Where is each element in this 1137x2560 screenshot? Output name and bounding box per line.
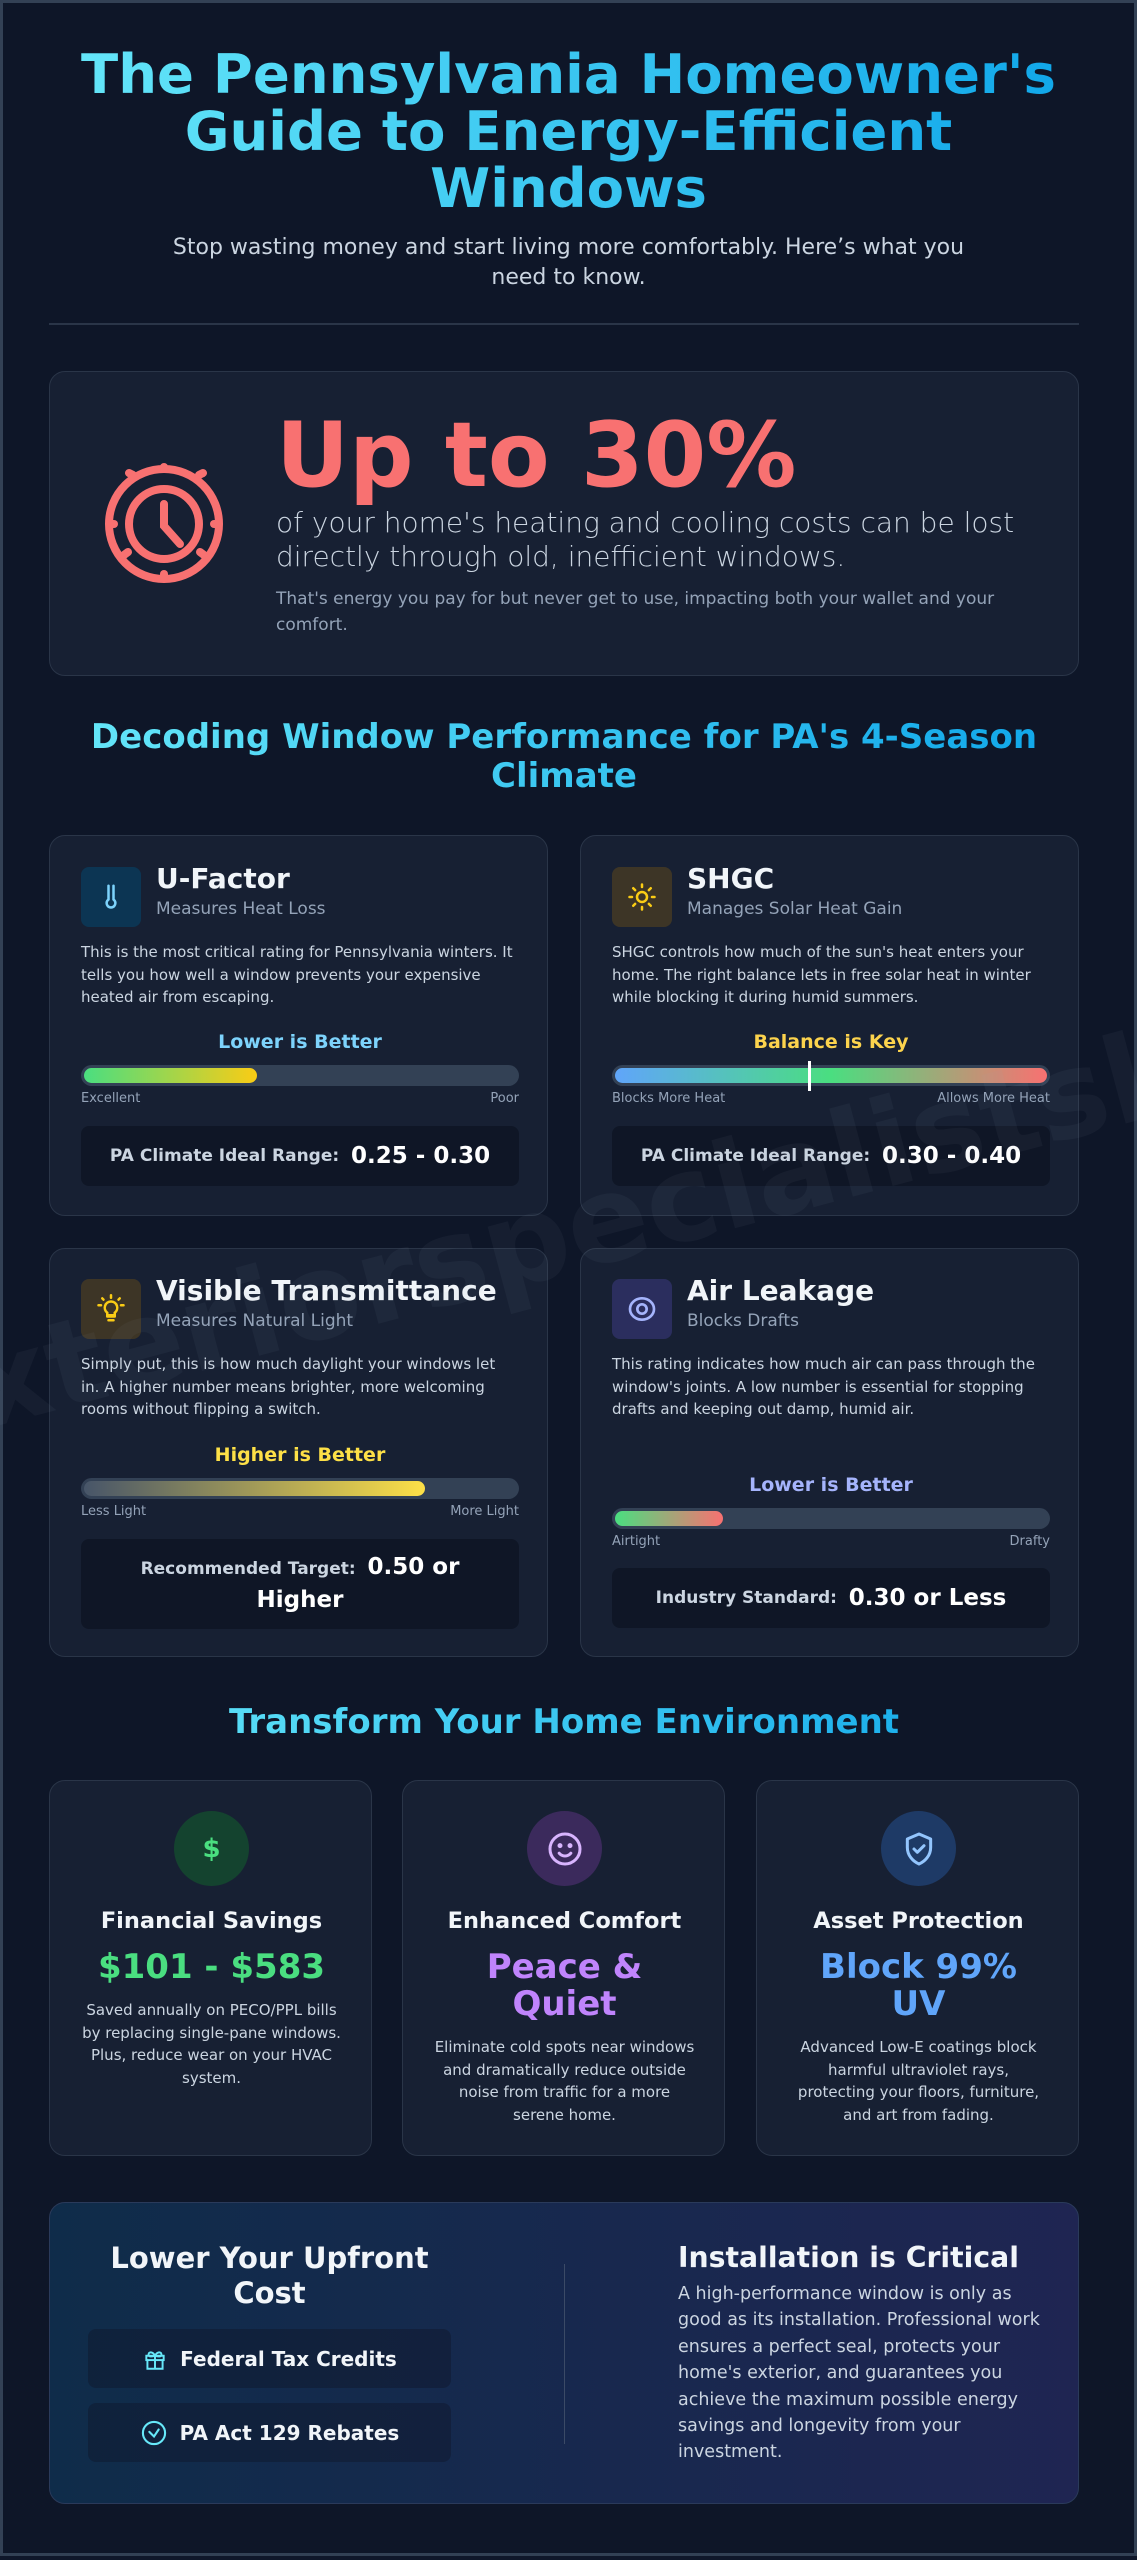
panel: financial savings: $101 - $583 bbox=[98, 1947, 325, 1987]
panel: SHGC: Balance is Key bbox=[753, 1031, 909, 1053]
text: installation: achieve the maximum possible energy bbox=[678, 2390, 1018, 2410]
panel: U-Factor: tells you how well a window prevents your expensive bbox=[81, 966, 481, 984]
heading: decoding: Decoding Window Performance for PA's 4-Season bbox=[91, 717, 1037, 757]
panel: Air Leakage: Industry Standard: bbox=[656, 1588, 837, 1608]
panel: Air Leakage: Lower is Better bbox=[749, 1474, 913, 1496]
bar: shgc bbox=[612, 1065, 1050, 1086]
panel: U-Factor: This is the most critical rating for Pennsylvania winters. It bbox=[81, 943, 513, 961]
stat description: of your home's heating and cooling costs can be lost bbox=[276, 506, 1014, 539]
panel: U-Factor: heated air from escaping. bbox=[81, 988, 274, 1006]
button: act 129 bbox=[88, 2403, 451, 2462]
text: installation: ensures a perfect seal, protects your bbox=[678, 2337, 1000, 2357]
panel: Air Leakage bbox=[580, 1248, 1079, 1657]
panel: Air Leakage: Airtight bbox=[612, 1534, 660, 1549]
panel: Air Leakage: This rating indicates how much air can pass through the bbox=[612, 1355, 1035, 1373]
button: tax credits bbox=[88, 2329, 451, 2388]
icon: dollar bbox=[174, 1811, 249, 1886]
panel: Visible Transmittance: in. A higher number means brighter, more welcoming bbox=[81, 1378, 485, 1396]
text: installation: good as its installation. Professional work bbox=[678, 2310, 1040, 2330]
button: act 129: PA Act 129 Rebates bbox=[180, 2420, 399, 2444]
icon: dollar: $ bbox=[202, 1834, 221, 1864]
heading: decoding: Climate bbox=[491, 756, 637, 796]
icon: smile bbox=[527, 1811, 602, 1886]
panel: Air Leakage: Air Leakage bbox=[687, 1274, 874, 1307]
panel: U-Factor: Poor bbox=[490, 1091, 519, 1106]
stat description: directly through old, inefficient windows. bbox=[276, 540, 845, 573]
text: installation: home's exterior, and guarantees you bbox=[678, 2363, 1002, 2383]
panel: SHGC: home. The right balance lets in free solar heat in winter bbox=[612, 966, 1031, 984]
panel: Visible Transmittance: Higher bbox=[257, 1587, 343, 1613]
panel: SHGC: Blocks More Heat bbox=[612, 1091, 725, 1106]
ideal range: PA Climate Ideal Range: bbox=[110, 1146, 339, 1166]
heading: lower cost: Cost bbox=[233, 2276, 306, 2310]
panel: asset protection: Asset Protection bbox=[813, 1908, 1024, 1934]
text: installation bbox=[678, 2284, 1040, 2462]
panel: financial savings: system. bbox=[182, 2068, 241, 2086]
text: installation: savings and longevity from your bbox=[678, 2416, 961, 2436]
icon: bulb bbox=[81, 1279, 141, 1339]
panel: Air Leakage: 0.30 or Less bbox=[849, 1585, 1006, 1611]
panel: Air Leakage: window's joints. A low number is essential for stopping bbox=[612, 1378, 1024, 1396]
ideal range: 0.25 - 0.30 bbox=[351, 1143, 490, 1169]
panel: Visible Transmittance: Less Light bbox=[81, 1504, 146, 1519]
title: The Pennsylvania Homeowner's bbox=[81, 42, 1056, 106]
panel: comfort bbox=[402, 1780, 725, 2156]
panel: SHGC: 0.30 - 0.40 bbox=[882, 1143, 1021, 1169]
panel: Visible Transmittance: Recommended Target: 0.50 or bbox=[141, 1554, 459, 1580]
subtitle: need to know. bbox=[491, 265, 646, 290]
title: Guide to Energy-Efficient bbox=[185, 99, 952, 163]
icon: alarm clock bbox=[105, 463, 223, 583]
title: Windows bbox=[430, 156, 707, 220]
heading: transform: Transform Your Home Environment bbox=[229, 1702, 899, 1742]
text: installation: investment. bbox=[678, 2442, 782, 2462]
panel: U-Factor: U-Factor bbox=[156, 862, 290, 895]
panel: Visible Transmittance: Simply put, this is how much daylight your windows let bbox=[81, 1355, 495, 1373]
panel: financial savings: Saved annually on PECO/PPL bills bbox=[86, 2001, 337, 2019]
icon: shield bbox=[881, 1811, 956, 1886]
panel: SHGC: Allows More Heat bbox=[937, 1091, 1050, 1106]
panel: Visible Transmittance: Visible Transmittance bbox=[156, 1274, 497, 1307]
panel: Air Leakage: Blocks Drafts bbox=[687, 1311, 799, 1331]
panel: comfort: and dramatically reduce outside bbox=[443, 2060, 686, 2078]
panel: SHGC: SHGC controls how much of the sun's heat enters your bbox=[612, 943, 1024, 961]
panel: asset protection: harmful ultraviolet rays, bbox=[828, 2060, 1009, 2078]
panel: Visible Transmittance: Higher is Better bbox=[215, 1444, 385, 1466]
panel: U-Factor bbox=[49, 835, 548, 1216]
panel: comfort: Peace & bbox=[487, 1947, 642, 1987]
panel: U-Factor: Excellent bbox=[81, 1091, 140, 1106]
panel: asset protection: Block 99% bbox=[820, 1947, 1017, 1987]
panel: financial savings bbox=[49, 1780, 372, 2156]
text: installation: A high-performance window is only as bbox=[678, 2284, 1012, 2304]
icon: thermometer bbox=[81, 867, 141, 927]
panel: SHGC: PA Climate Ideal Range: bbox=[641, 1146, 870, 1166]
button: tax credits: Federal Tax Credits bbox=[180, 2346, 397, 2370]
panel: comfort: serene home. bbox=[513, 2106, 616, 2124]
panel: SHGC bbox=[580, 835, 1079, 1216]
stat note: That's energy you pay for but never get to use, impacting both your wallet and your bbox=[276, 589, 994, 609]
panel: comfort: noise from traffic for a more bbox=[459, 2083, 670, 2101]
panel: U-Factor: Measures Heat Loss bbox=[156, 899, 326, 919]
bar: air bbox=[612, 1508, 1050, 1529]
panel: U-Factor: Lower is Better bbox=[218, 1031, 382, 1053]
heading: decoding bbox=[49, 718, 1079, 796]
panel: financial savings: Plus, reduce wear on your HVAC bbox=[91, 2046, 332, 2064]
panel: asset protection bbox=[756, 1780, 1079, 2156]
headline stat: Up to 30% bbox=[276, 403, 796, 508]
panel: Air Leakage: drafts and keeping out damp, humid air. bbox=[612, 1400, 914, 1418]
panel: SHGC: SHGC bbox=[687, 862, 774, 895]
panel: cost & installation bbox=[49, 2202, 1079, 2504]
panel: asset protection: Advanced Low-E coatings block bbox=[800, 2038, 1037, 2056]
panel: SHGC: while blocking it during humid summers. bbox=[612, 988, 918, 1006]
panel: Visible Transmittance bbox=[49, 1248, 548, 1657]
panel: 30% stat bbox=[49, 371, 1079, 676]
panel: Visible Transmittance: More Light bbox=[450, 1504, 519, 1519]
panel: Visible Transmittance: Measures Natural Light bbox=[156, 1311, 353, 1331]
panel: asset protection: and art from fading. bbox=[843, 2106, 994, 2124]
panel: comfort: Enhanced Comfort bbox=[448, 1908, 681, 1934]
panel: comfort: Quiet bbox=[512, 1984, 617, 2024]
subtitle: Stop wasting money and start living more comfortably. Here’s what you bbox=[173, 235, 964, 260]
heading: lower cost bbox=[110, 2241, 429, 2310]
ideal range bbox=[81, 1126, 519, 1186]
subtitle bbox=[173, 235, 964, 290]
stat description bbox=[276, 506, 1014, 573]
panel: Visible Transmittance: rooms without flipping a switch. bbox=[81, 1400, 321, 1418]
bar: vt bbox=[81, 1478, 519, 1499]
panel: comfort: Eliminate cold spots near windows bbox=[435, 2038, 694, 2056]
panel: Air Leakage: Drafty bbox=[1010, 1534, 1050, 1549]
panel: financial savings: by replacing single-pane windows. bbox=[82, 2024, 341, 2042]
panel: financial savings: Financial Savings bbox=[101, 1908, 322, 1934]
panel: asset protection: protecting your floors, furniture, bbox=[798, 2083, 1039, 2101]
icon: sun bbox=[612, 867, 672, 927]
heading: lower cost: Lower Your Upfront bbox=[110, 2241, 429, 2275]
heading: transform bbox=[49, 1702, 1079, 1742]
title bbox=[40, 46, 1097, 217]
panel: asset protection: UV bbox=[892, 1984, 945, 2024]
stat note: comfort. bbox=[276, 615, 348, 635]
bar: u-factor bbox=[81, 1065, 519, 1086]
heading: installation: Installation is Critical bbox=[678, 2241, 1019, 2274]
panel: SHGC: Manages Solar Heat Gain bbox=[687, 899, 902, 919]
icon: eye bbox=[612, 1279, 672, 1339]
stat note bbox=[276, 589, 994, 635]
